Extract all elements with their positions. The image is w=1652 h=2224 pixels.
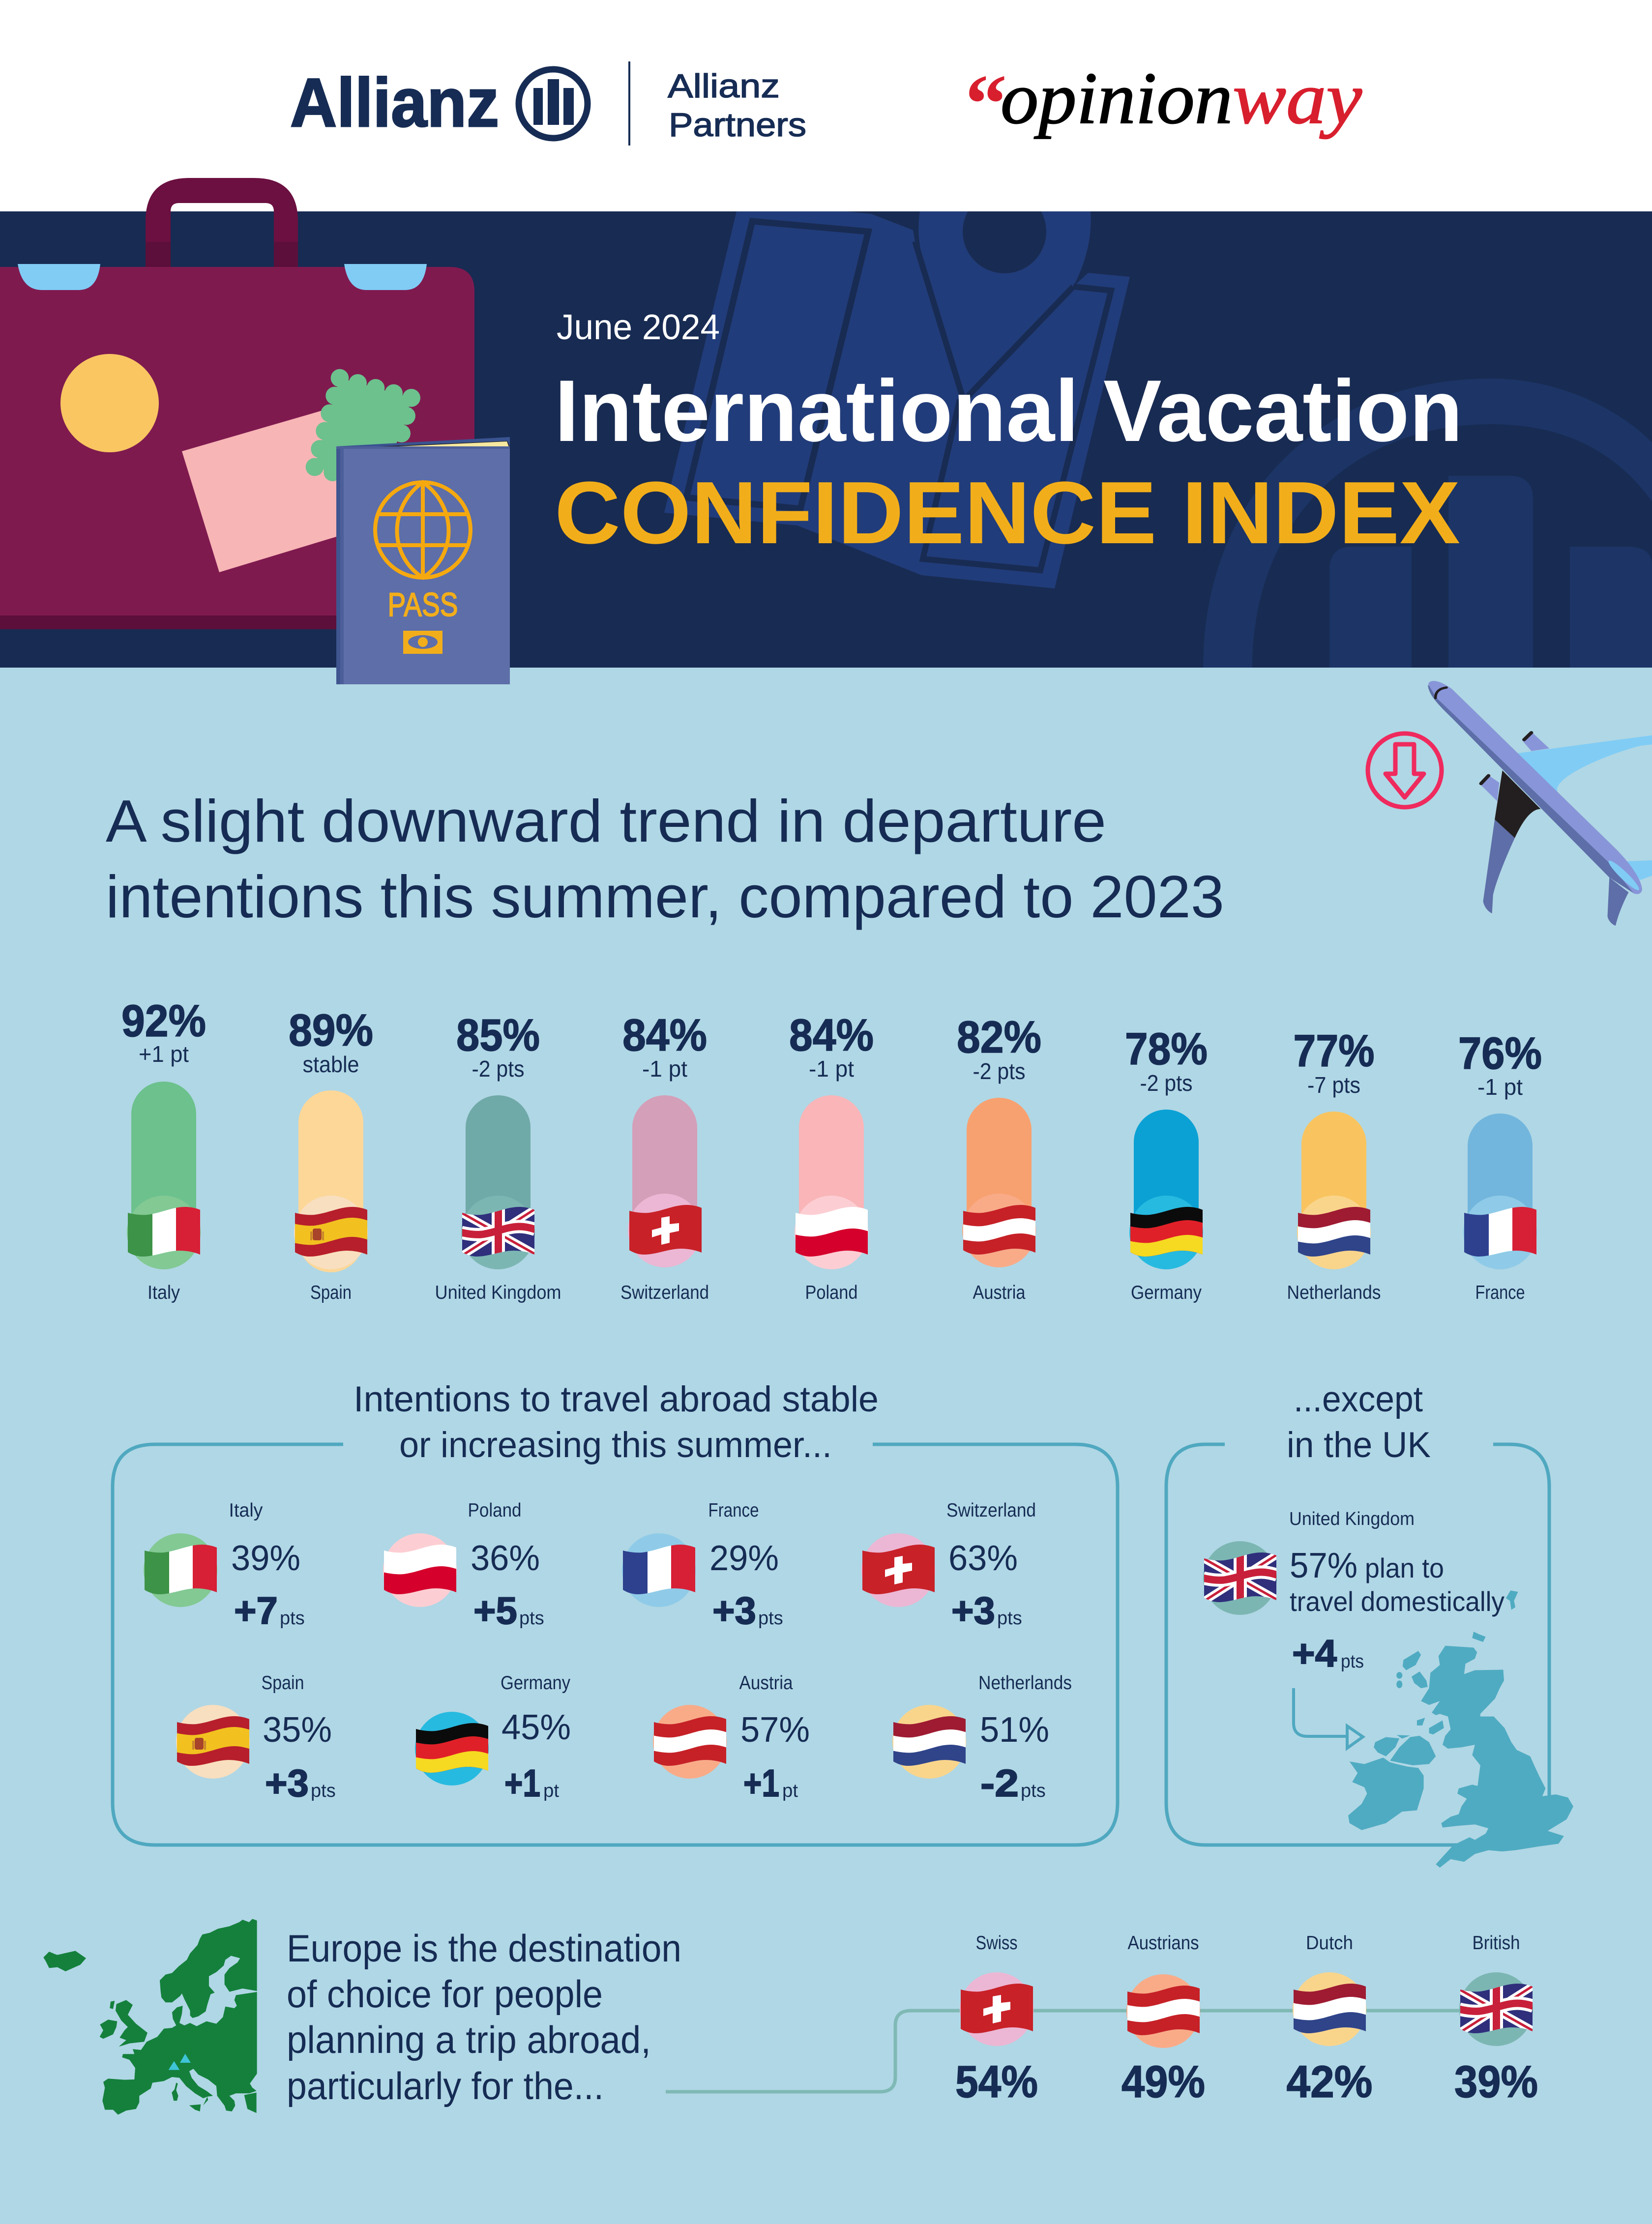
item: Italy [144, 1500, 305, 1632]
panel frame [1166, 1444, 1549, 1845]
text: Europe destination: of choice for people [287, 1972, 603, 2016]
bar: Switzerland [620, 1010, 709, 1303]
bar: Netherlands: -7 pts [1307, 1072, 1360, 1098]
change: pts [1341, 1651, 1364, 1672]
bar: France: -1 pt [1477, 1074, 1523, 1100]
item: Netherlands [892, 1672, 1072, 1843]
bar: Italy: +1 pt [139, 1041, 189, 1067]
item: Spain: pts [311, 1781, 336, 1801]
item: Italy: pts [280, 1608, 305, 1629]
bar: Germany: -2 pts [1140, 1070, 1193, 1096]
item: France [622, 1500, 783, 1632]
item: Spain: +3 [265, 1761, 309, 1805]
item: Poland: 36% [471, 1539, 540, 1578]
markers: Alps triangles [169, 2054, 191, 2070]
bar: France [1458, 1028, 1542, 1303]
item: Austria: 57% [740, 1710, 810, 1750]
bar: Austria: 82% [957, 1012, 1041, 1062]
item: British: 39% [1454, 2057, 1538, 2107]
arrow [1294, 1688, 1363, 1748]
item: Austrians [1121, 1932, 1205, 2112]
bar: Poland: 84% [789, 1010, 874, 1060]
bar: Italy: 92% [121, 996, 206, 1046]
luggage tag [182, 406, 339, 572]
bar: Austria [957, 1012, 1041, 1332]
item: Germany: 45% [502, 1708, 571, 1747]
panel heading [354, 1379, 879, 1465]
country label: United Kingdom [1289, 1509, 1415, 1529]
chart: departure intentions by country [121, 996, 1542, 1335]
text: Europe destination: planning a trip abroad, [287, 2018, 651, 2061]
item: Dutch: 42% [1286, 2057, 1373, 2107]
panel heading: or increasing this summer... [399, 1425, 832, 1465]
item: British: British [1472, 1932, 1520, 1954]
item: Netherlands: Netherlands [978, 1672, 1072, 1694]
bar: Spain: stable [303, 1052, 359, 1077]
bar: Germany: 78% [1125, 1024, 1208, 1074]
panel: stable or increasing [113, 1379, 1118, 1849]
passport label: PASS [387, 586, 458, 623]
panel frame [113, 1444, 1118, 1845]
bar: Italy [121, 996, 206, 1303]
map: Europe [43, 1919, 257, 2115]
item: British [1454, 1932, 1538, 2107]
bar: Netherlands: Netherlands [1287, 1282, 1381, 1303]
illustration: passport [336, 437, 510, 684]
item: Spain [176, 1672, 336, 1844]
item: France: pts [758, 1608, 783, 1629]
item: Austria [653, 1672, 810, 1843]
bar: United Kingdom: United Kingdom [435, 1282, 561, 1303]
title line 2: CONFIDENCE INDEX [555, 464, 1460, 562]
item: France: +3 [712, 1589, 756, 1632]
item: Dutch: Dutch [1306, 1932, 1353, 1954]
item: Netherlands: pts [1021, 1781, 1046, 1801]
item: Austrians: Austrians [1128, 1932, 1199, 1954]
item: Italy: Italy [229, 1500, 263, 1521]
item: France: 29% [709, 1539, 779, 1578]
item: Austria: pt [782, 1781, 798, 1801]
text: Europe destination: particularly for the... [287, 2064, 604, 2107]
item: Switzerland: pts [997, 1608, 1022, 1629]
bar: Germany [1125, 1024, 1208, 1333]
panel heading: ...except [1294, 1379, 1423, 1419]
item: Switzerland [861, 1500, 1036, 1632]
item: Netherlands: -2 [980, 1761, 1019, 1805]
bar: Spain: Spain [310, 1282, 352, 1303]
item: Austrians: 49% [1121, 2057, 1205, 2107]
item: Swiss: 54% [955, 2057, 1038, 2107]
item: Poland: +5 [473, 1589, 517, 1632]
item: Swiss [955, 1932, 1038, 2107]
bar: France: 76% [1458, 1028, 1542, 1079]
decorative map and pin [664, 190, 1130, 588]
panel: header band [0, 190, 1652, 668]
title line 1: International Vacation [555, 362, 1463, 460]
item: Switzerland: Switzerland [946, 1500, 1036, 1521]
foliage [306, 369, 420, 481]
illustration: suitcase [0, 178, 474, 629]
bar: Switzerland: 84% [622, 1010, 707, 1060]
item: Swiss: Swiss [975, 1932, 1018, 1954]
logo: Allianz Partners: Allianz [668, 67, 780, 105]
heading: downward trend: intentions this summer, compared to 2023 [106, 863, 1224, 930]
bar: United Kingdom: 85% [456, 1010, 540, 1060]
icon: globe [375, 482, 471, 578]
bar: United Kingdom: -2 pts [472, 1056, 524, 1082]
bar: Austria: Austria [973, 1282, 1026, 1303]
panel heading: Intentions to travel abroad stable [354, 1379, 879, 1419]
item: Germany [415, 1672, 571, 1849]
bar: Spain [289, 1005, 373, 1335]
bar: Switzerland: Switzerland [620, 1282, 709, 1303]
icon: UK flag [1202, 1541, 1279, 1615]
icon: chip [403, 631, 442, 654]
panel heading: in the UK [1287, 1425, 1431, 1465]
item: Germany: +1 [504, 1761, 540, 1805]
item: Spain: 35% [263, 1710, 332, 1750]
text: Europe destination: Europe is the destination [287, 1927, 681, 1970]
item: Austria: +1 [743, 1761, 779, 1805]
bar: Switzerland: -1 pt [642, 1056, 687, 1082]
item: Spain: Spain [262, 1672, 304, 1694]
stat text: travel domestically [1290, 1586, 1504, 1617]
logo: Allianz Partners [668, 67, 806, 144]
stat text [1290, 1546, 1504, 1617]
change [1292, 1632, 1364, 1675]
item: Germany: Germany [501, 1672, 570, 1694]
chart: Europe destination by nationality [955, 1932, 1538, 2112]
bar: Netherlands [1287, 1026, 1381, 1334]
bar: Poland: Poland [805, 1282, 857, 1303]
bar: Netherlands: 77% [1293, 1026, 1375, 1076]
decorative Allianz emblem [1203, 379, 1652, 668]
logo: opinionway: “ [965, 58, 1007, 150]
item: Dutch [1286, 1932, 1373, 2110]
divider line [628, 61, 630, 146]
change: +4 [1292, 1632, 1337, 1675]
item: France: France [708, 1500, 759, 1521]
bar: Spain: 89% [289, 1005, 373, 1055]
heading: downward trend [106, 788, 1224, 930]
item: Italy: 39% [231, 1539, 300, 1578]
bar: Italy: Italy [148, 1282, 180, 1303]
logo: Allianz: Allianz [290, 64, 499, 141]
bar: Germany: Germany [1131, 1282, 1202, 1303]
date: June 2024 [557, 308, 720, 347]
item: Poland: pts [519, 1608, 544, 1629]
icon: down arrow [1368, 733, 1442, 807]
item: Germany: pt [543, 1781, 559, 1801]
logo: opinionway: opinion [1001, 58, 1233, 139]
item: Switzerland: +3 [951, 1589, 995, 1632]
item: Switzerland: 63% [948, 1539, 1018, 1578]
bar: Poland: -1 pt [809, 1056, 854, 1082]
item: Poland [383, 1500, 544, 1665]
panel heading [1287, 1379, 1431, 1465]
map: UK and Ireland [1348, 1590, 1573, 1868]
logo: opinionway [965, 58, 1362, 150]
item: Austria: Austria [739, 1672, 793, 1694]
panel: except in the UK [1166, 1379, 1573, 1868]
item: Netherlands: 51% [980, 1710, 1049, 1750]
bar: Poland [789, 1010, 874, 1327]
illustration: airplane [1428, 681, 1652, 926]
bar: France: France [1475, 1282, 1525, 1303]
stat text: plan to [1365, 1552, 1444, 1583]
item: Italy: +7 [234, 1589, 278, 1632]
connector line [666, 2011, 1475, 2092]
bar: United Kingdom [435, 1010, 561, 1303]
bar: Austria: -2 pts [973, 1058, 1026, 1084]
logo: Allianz Partners: Partners [669, 106, 806, 144]
heading: downward trend: A slight downward trend in departure [106, 788, 1106, 854]
logo: opinionway: way [1233, 58, 1362, 139]
item: Poland: Poland [468, 1500, 521, 1521]
text: Europe destination [287, 1927, 681, 2107]
stat text: 57% [1290, 1546, 1357, 1585]
panel: logos strip [0, 0, 1652, 211]
